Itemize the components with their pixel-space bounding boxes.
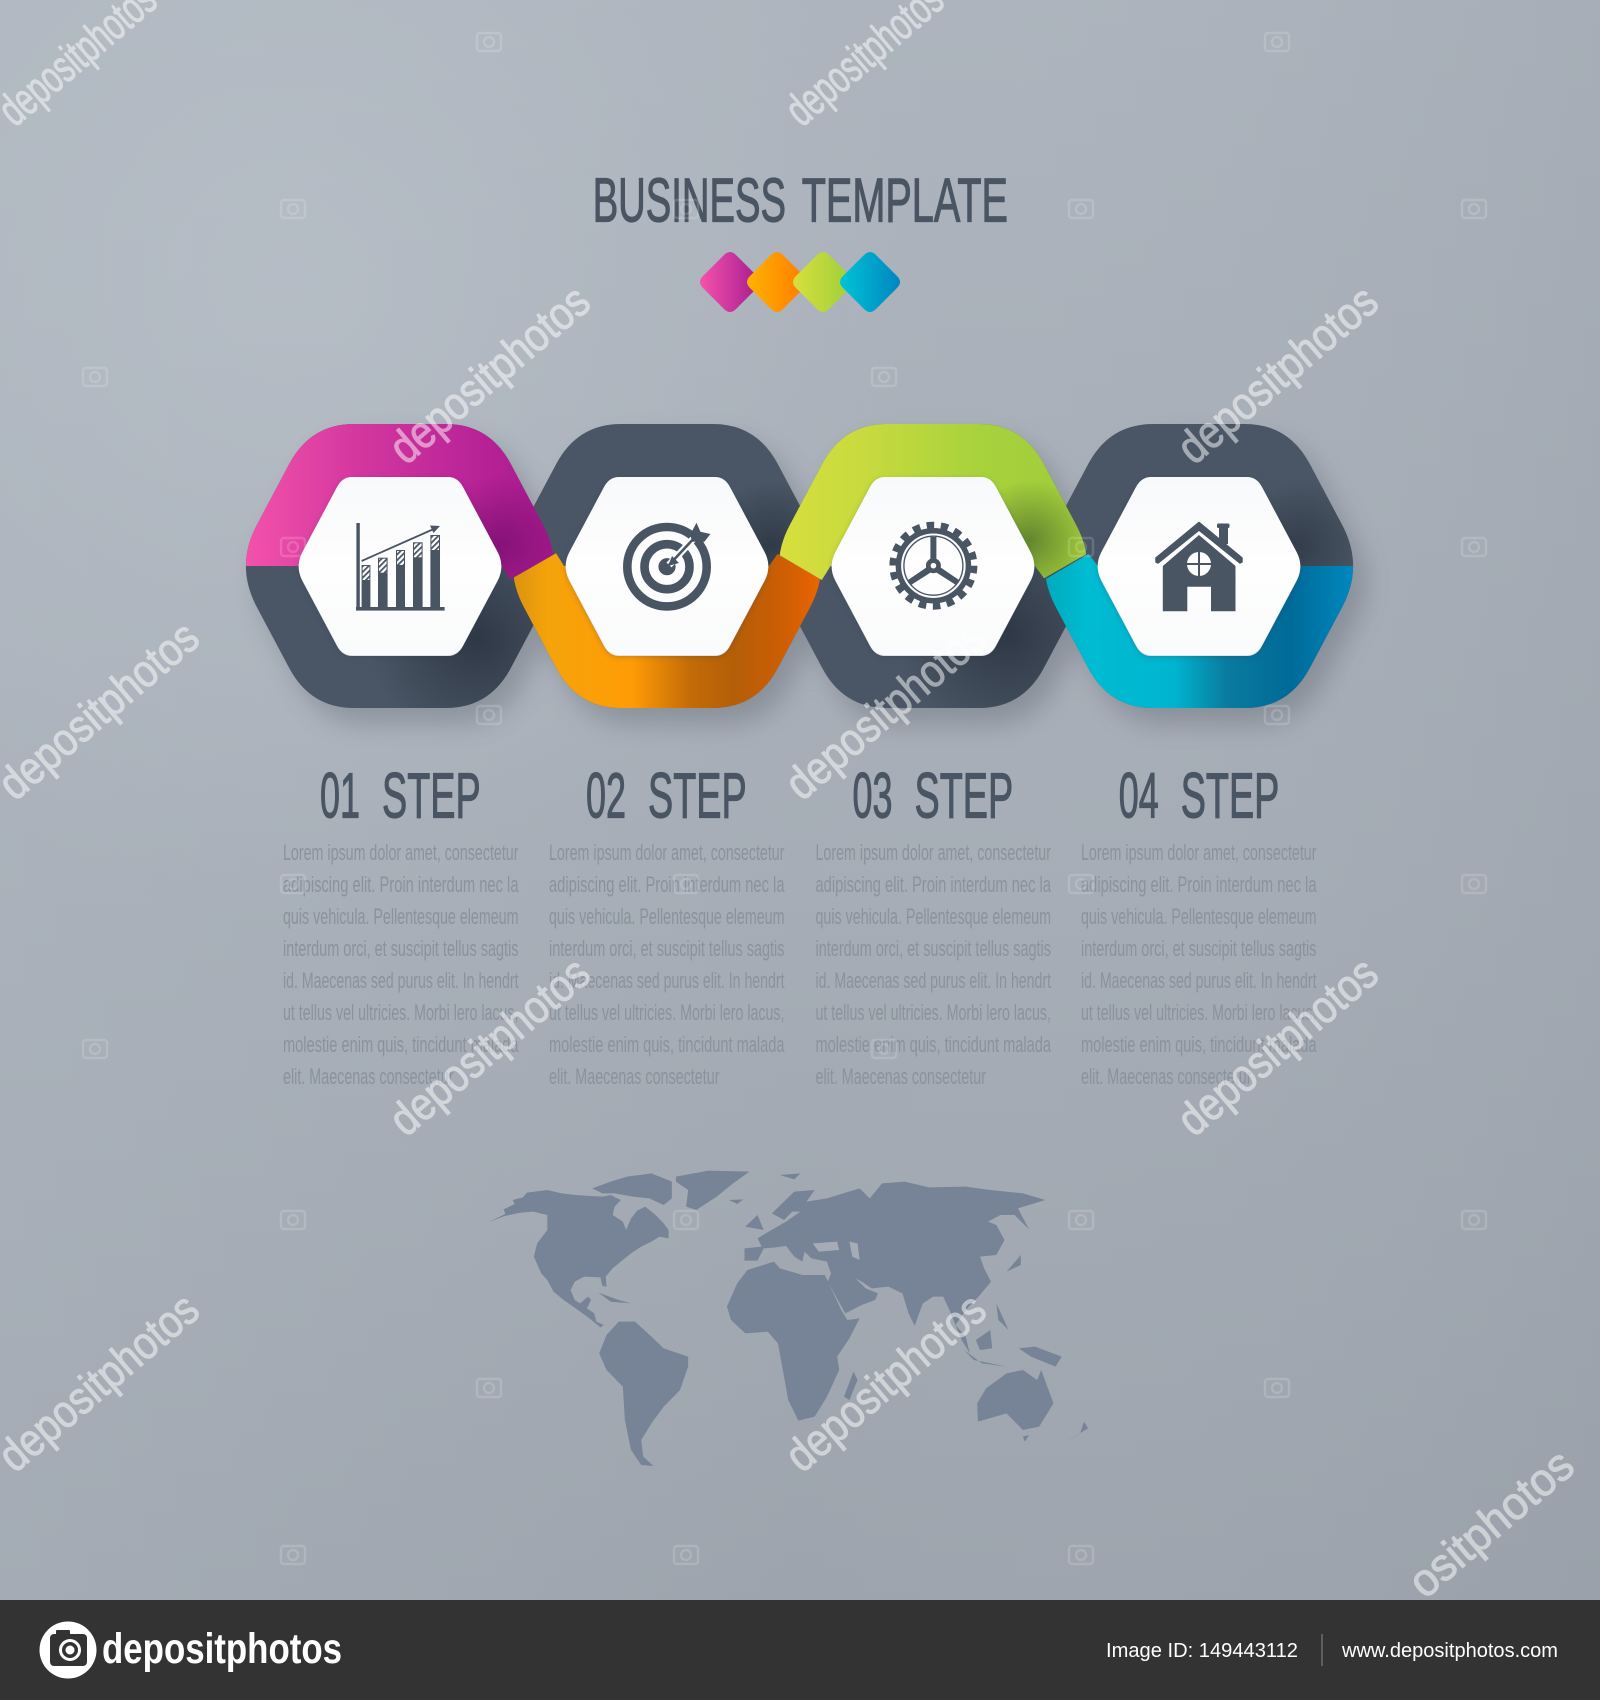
dark hexagons	[246, 424, 1353, 708]
body text 1: id. Maecenas sed purus elit. In hendrt	[283, 968, 518, 993]
heading: 02 step: 02	[586, 760, 626, 832]
icon: gear	[893, 525, 974, 606]
title: BUSINESS	[593, 166, 786, 236]
watermarks: depositphotos	[379, 946, 600, 1146]
body text 4: molestie enim quis, tincidunt malada	[1081, 1032, 1317, 1057]
body text 4: quis vehicula. Pellentesque elemeum	[1081, 904, 1316, 929]
body text 2: adipiscing elit. Proin interdum nec la	[549, 872, 785, 897]
body text 4: ut tellus vel ultricies. Morbi lero lacus,	[1081, 1000, 1316, 1025]
body text 4: id. Maecenas sed purus elit. In hendrt	[1081, 968, 1316, 993]
white hexagon 1	[299, 477, 501, 657]
body text 2: ut tellus vel ultricies. Morbi lero lacus,	[549, 1000, 784, 1025]
step 3	[816, 760, 1052, 1089]
icon: target with arrow	[627, 523, 710, 606]
watermarks: ositphotos	[1398, 1438, 1584, 1608]
watermarks: depositphotos	[775, 1282, 996, 1482]
white hexagon 2	[566, 477, 768, 657]
ribbon: green	[780, 424, 1086, 580]
hexagon chain	[246, 424, 1365, 724]
body text 1: quis vehicula. Pellentesque elemeum	[283, 904, 518, 929]
step 1	[283, 760, 519, 1089]
ribbon: orange	[514, 553, 820, 708]
body text 3: molestie enim quis, tincidunt malada	[816, 1032, 1052, 1057]
colored diamonds	[700, 252, 900, 312]
icon: bar chart	[356, 523, 445, 611]
body text 3: interdum orci, et suscipit tellus sagtis	[816, 936, 1051, 961]
body text 4: Lorem ipsum dolor amet, consectetur	[1081, 840, 1316, 865]
body text 2: quis vehicula. Pellentesque elemeum	[549, 904, 784, 929]
heading: 01 step: 01	[320, 760, 360, 832]
body text 3: id. Maecenas sed purus elit. In hendrt	[816, 968, 1051, 993]
body text 3: quis vehicula. Pellentesque elemeum	[816, 904, 1051, 929]
body text 1: ut tellus vel ultricies. Morbi lero lacus,	[283, 1000, 518, 1025]
stock photo camera marks	[83, 33, 1486, 1564]
image id: Image ID: 149443112	[1106, 1640, 1298, 1662]
website url: www.depositphotos.com	[1341, 1640, 1558, 1662]
heading: 04 step: STEP	[1181, 760, 1279, 832]
body text 4: adipiscing elit. Proin interdum nec la	[1081, 872, 1317, 897]
heading: 01 step: STEP	[382, 760, 481, 832]
footer bar	[0, 1600, 1600, 1700]
heading: 03 step: 03	[852, 760, 892, 832]
ribbon: blue	[1046, 554, 1354, 708]
body text 1: adipiscing elit. Proin interdum nec la	[283, 872, 519, 897]
white hexagon 3	[832, 477, 1034, 657]
watermarks: depositphotos	[1167, 274, 1388, 474]
body text 1: elit. Maecenas consectetur	[283, 1064, 454, 1089]
body text 2: interdum orci, et suscipit tellus sagtis	[549, 936, 784, 961]
soft drop shadow	[258, 440, 1365, 724]
body text 4: interdum orci, et suscipit tellus sagtis	[1081, 936, 1316, 961]
body text 3: ut tellus vel ultricies. Morbi lero lacus,	[816, 1000, 1051, 1025]
body text 1: Lorem ipsum dolor amet, consectetur	[283, 840, 518, 865]
title: TEMPLATE	[802, 166, 1008, 236]
watermarks: depositphotos	[1167, 946, 1388, 1146]
logo text: depositphotos	[102, 1625, 342, 1673]
body text 1: interdum orci, et suscipit tellus sagtis	[283, 936, 518, 961]
body text 3: adipiscing elit. Proin interdum nec la	[816, 872, 1052, 897]
heading: 03 step: STEP	[914, 760, 1013, 832]
body text 3: elit. Maecenas consectetur	[816, 1064, 986, 1089]
body text 2: id. Maecenas sed purus elit. In hendrt	[549, 968, 784, 993]
step 2	[549, 760, 785, 1089]
body text 2: elit. Maecenas consectetur	[549, 1064, 720, 1089]
watermarks: depositphotos	[775, 610, 996, 810]
ribbon: pink	[246, 424, 554, 580]
body text 2: Lorem ipsum dolor amet, consectetur	[549, 840, 784, 865]
body text 2: molestie enim quis, tincidunt malada	[549, 1032, 785, 1057]
body text 4: elit. Maecenas consectetur	[1081, 1064, 1252, 1089]
icon: house	[1156, 522, 1242, 611]
heading: 04 step: 04	[1119, 760, 1159, 832]
heading: 02 step: STEP	[648, 760, 747, 832]
step 4	[1081, 760, 1317, 1089]
body text 3: Lorem ipsum dolor amet, consectetur	[816, 840, 1051, 865]
body text 1: molestie enim quis, tincidunt malada	[283, 1032, 519, 1057]
world map	[488, 1171, 1088, 1466]
white hexagon 4	[1098, 477, 1300, 657]
logo mark	[40, 1622, 96, 1678]
watermarks: depositphotos	[379, 274, 600, 474]
